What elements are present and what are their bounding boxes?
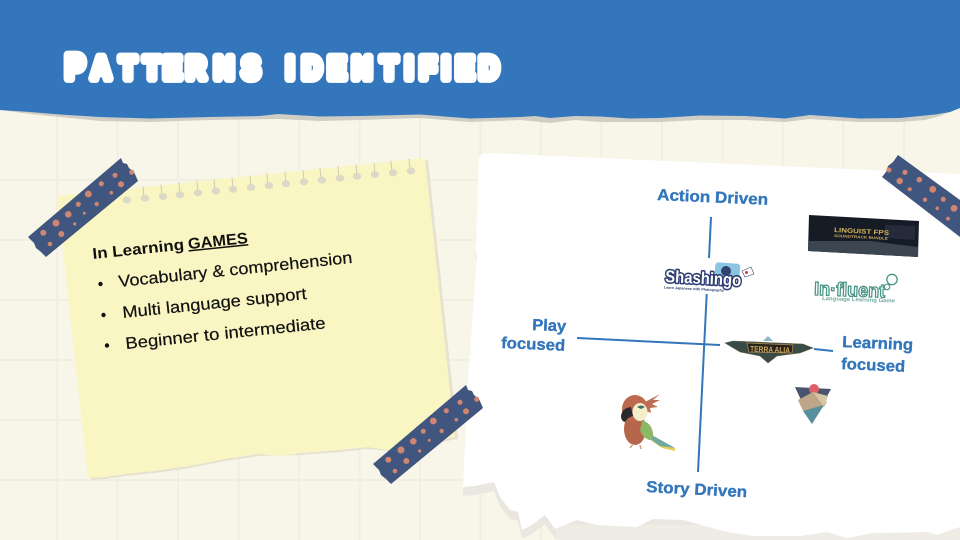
logo: linguist fps: SOUNDTRACK BUNDLE: [834, 234, 889, 241]
bullet: multi language: Multi language support: [122, 285, 308, 322]
label: play focused: focused: [501, 335, 566, 355]
logo: shashingo: Shashingo: [665, 267, 742, 290]
logo: influent: Language Learning Game: [822, 296, 895, 305]
label: learning focused: focused: [841, 356, 906, 376]
logo: influent: In·fluent: [814, 279, 886, 302]
note heading: GAMES: [187, 230, 249, 253]
label: play focused: Play: [532, 317, 567, 335]
bullet: vocabulary: Vocabulary & comprehension: [118, 249, 353, 291]
note paper: [57, 158, 458, 480]
label: action driven: Action Driven: [657, 187, 768, 209]
title: [65, 47, 499, 86]
label: story driven: Story Driven: [646, 479, 748, 501]
label: learning focused: [841, 334, 913, 376]
yellow note: [57, 158, 458, 480]
logo: linguist fps: [808, 215, 919, 257]
washi tape: bottom middle: [373, 385, 483, 484]
label: play focused: [501, 317, 567, 355]
note heading: In Learning: [92, 237, 185, 263]
washi tape: top right: [882, 155, 960, 237]
binder holes: [123, 159, 415, 204]
quadrant panel: [463, 153, 960, 540]
note heading: [92, 230, 249, 263]
title: ATTERNS: [91, 50, 260, 86]
logo: shashingo: Learn Japanese with Photography: [664, 286, 724, 293]
axes: [577, 217, 833, 472]
panel paper: [463, 153, 960, 540]
logo: terra alia: [725, 336, 813, 363]
logo: linguist fps: LINGUIST FPS: [834, 227, 890, 237]
title: IDENTIFIED: [286, 50, 499, 86]
bullet: beginner: Beginner to intermediate: [125, 314, 326, 353]
label: learning focused: Learning: [842, 334, 913, 354]
logo: mountain triangle: [795, 384, 831, 424]
illustration: parrot: [621, 394, 675, 451]
header band: [0, 0, 960, 123]
title: P: [65, 47, 85, 86]
logo: terra alia: TERRA ALIA: [750, 345, 790, 355]
washi tape: top left: [28, 158, 138, 257]
